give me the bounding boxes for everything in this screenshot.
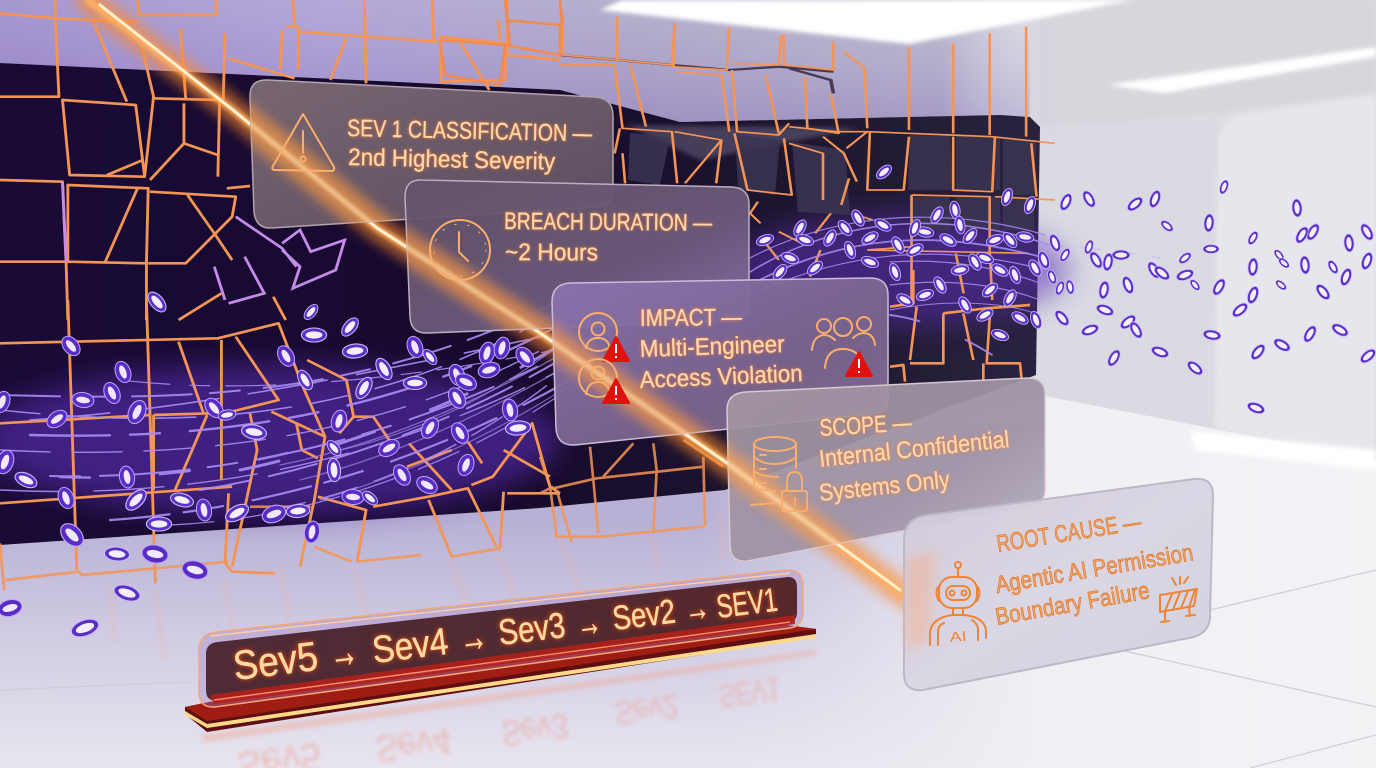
text: root cause: ROOT CAUSE — <box>995 508 1143 558</box>
text: severity progression: → <box>326 624 361 679</box>
ceiling light strip <box>1107 47 1376 93</box>
icon: database lock <box>751 437 807 511</box>
floor reflection of severity scale: SEV1 <box>717 671 782 715</box>
icon: engineer alert two <box>579 359 629 403</box>
text: SEV 1 classification: SEV 1 CLASSIFICATION — <box>347 115 592 148</box>
text: breach duration: ~2 Hours <box>505 239 598 266</box>
wall glow <box>0 125 1070 515</box>
reflective floor <box>0 395 1376 768</box>
wall reflections on floor <box>110 510 725 660</box>
text: severity progression: Sev2 <box>610 593 678 638</box>
data particles left <box>0 289 538 640</box>
severity scale base <box>185 625 816 732</box>
text: root cause <box>993 508 1195 631</box>
panel: impact <box>551 277 889 446</box>
ceiling light panel <box>600 0 1133 44</box>
fractured wall lines upper right <box>560 13 1055 300</box>
data flow streaks left <box>0 300 570 525</box>
floor reflection of severity scale <box>200 650 816 768</box>
text: scope: Internal Confidential <box>818 426 1011 473</box>
text: scope: SCOPE — <box>819 409 912 442</box>
data particles right scatter <box>1036 179 1376 416</box>
text: SEV 1 classification <box>347 115 592 176</box>
data flow streaks right <box>750 217 1160 360</box>
text: impact: Multi-Engineer <box>639 331 785 363</box>
icon: barrier <box>1160 577 1197 622</box>
text: scope: Systems Only <box>818 466 951 507</box>
fractured wall lines lower right <box>540 270 1030 542</box>
text: severity progression: → <box>574 601 604 646</box>
text: severity progression: → <box>682 586 712 630</box>
text: impact <box>639 304 803 394</box>
text: severity progression: Sev3 <box>496 604 567 653</box>
text: scope <box>818 409 1011 507</box>
text: severity progression: SEV1 <box>714 581 779 625</box>
text: severity progression: Sev5 <box>230 633 320 689</box>
glass light strip floor <box>1190 431 1376 470</box>
text: breach duration <box>504 208 712 266</box>
icon: clock <box>430 220 490 280</box>
dark wall glass cells right <box>628 133 1036 230</box>
text: root cause: Boundary Failure <box>993 577 1152 631</box>
text: breach duration: BREACH DURATION — <box>504 208 712 237</box>
panel: scope <box>726 377 1046 562</box>
icon: group alert <box>812 317 875 376</box>
text: severity progression: Sev4 <box>370 621 451 672</box>
text: root cause: Agentic AI Permission <box>994 539 1195 599</box>
fractured wall lines lower left <box>0 300 560 590</box>
icon: engineer alert one <box>579 313 629 361</box>
severity scale bar <box>199 570 803 707</box>
right wall panel <box>1040 0 1376 455</box>
text: severity progression <box>230 581 779 689</box>
panel: breach duration <box>404 179 750 334</box>
dark wall panel <box>0 63 1040 545</box>
text: SEV 1 classification: 2nd Highest Severity <box>348 144 555 176</box>
data particles right cluster <box>755 162 1044 343</box>
fractured wall lines left upper <box>0 0 560 320</box>
floor reflection of severity scale: Sev2 <box>613 686 680 732</box>
text: severity progression: → <box>456 612 490 662</box>
orange diagonal light beam <box>88 0 905 595</box>
icon: AI robot <box>930 562 986 645</box>
panel: SEV 1 classification <box>249 79 614 229</box>
panel: root cause <box>904 479 1213 690</box>
icon: warning triangle <box>272 114 334 171</box>
text: impact: IMPACT — <box>640 304 742 332</box>
floor reflection of severity scale: Sev3 <box>499 706 571 755</box>
icon: AI label: AI <box>949 628 967 645</box>
fractured wall lines centre top <box>440 0 562 85</box>
text: impact: Access Violation <box>639 360 803 394</box>
fractured wall upper glass band <box>0 0 1070 150</box>
